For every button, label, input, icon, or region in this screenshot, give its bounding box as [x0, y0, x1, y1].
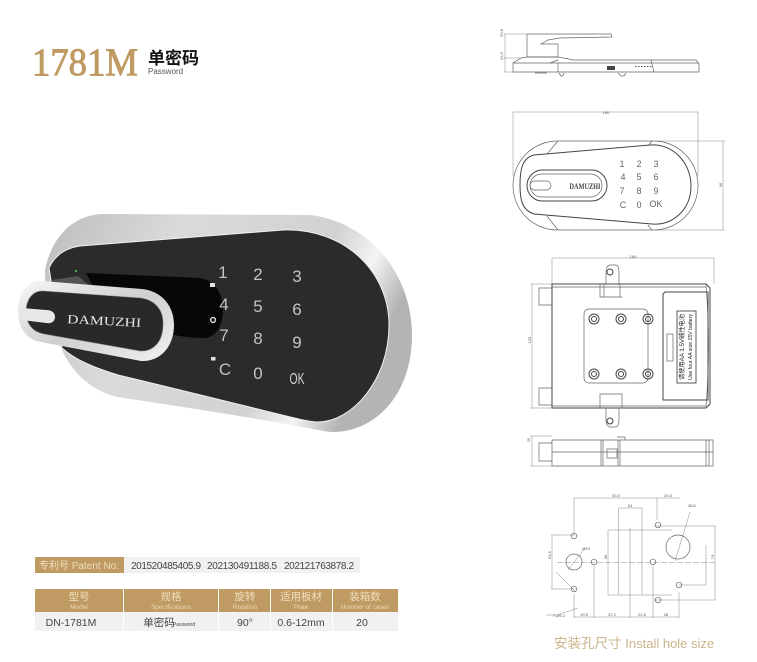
drawing: install hole dimensions: 54.5: [547, 550, 552, 559]
battery label: 请使用AA 1.5V碱性电池: [678, 314, 686, 380]
drawing: install hole dimensions: 20.5: [664, 493, 673, 498]
front keypad digits: 3: [653, 159, 659, 169]
drawing: front view: [513, 110, 725, 230]
drawing: install hole dimensions: Ø24: [688, 503, 697, 508]
drawing: side view: [499, 28, 699, 76]
front keypad digits: 1: [619, 159, 625, 169]
keypad status icons: [210, 283, 216, 360]
specification table: Specifications: [151, 604, 192, 611]
back case: [552, 284, 710, 408]
battery label: [677, 311, 696, 383]
front keypad digits: C: [620, 200, 627, 210]
front keypad digits: OK: [649, 199, 663, 209]
keypad digits: 7: [219, 326, 229, 345]
table row: Password: [173, 622, 195, 628]
mounting plate: [584, 309, 648, 383]
patent bar: [35, 557, 360, 573]
mounting screws: [589, 314, 653, 379]
keypad digits: C: [219, 360, 231, 379]
battery label: Use four AA size 15V battery: [688, 314, 694, 380]
drawing: front view: 96: [718, 182, 723, 187]
keypad digits: 4: [219, 295, 229, 314]
drawing: side view: 24.5: [499, 51, 504, 60]
side tabs: [539, 288, 552, 405]
front keypad digits: 4: [620, 172, 626, 182]
patent bar: 201520485405.9: [131, 561, 201, 572]
subtitle: password type: 单密码: [148, 48, 199, 68]
specification table: Rotation: [233, 604, 257, 611]
patent bar: 专利号 Patent No:: [39, 559, 119, 572]
table row: 20: [356, 617, 368, 629]
drawing: back view: 160: [630, 254, 637, 259]
drawing: bottom view: 25: [526, 437, 531, 442]
silver body: [45, 214, 412, 432]
keypad digits: 1: [218, 263, 228, 282]
drawing: install hole dimensions: 19.5: [580, 612, 589, 617]
title: model number: 1781M: [32, 41, 138, 84]
drawing: install hole dimensions: [546, 493, 716, 618]
keypad digits: 9: [292, 333, 302, 352]
specification table: Plate: [294, 604, 309, 611]
top bracket: [600, 265, 622, 297]
specification table: 装箱数: [349, 590, 381, 603]
drawing: install hole dimensions: 7-Ø5.2: [553, 613, 566, 618]
keypad digits: 8: [253, 329, 263, 348]
subtitle: password type: [148, 48, 199, 76]
specification table: 规格: [160, 590, 182, 603]
front keypad face: [520, 145, 691, 224]
front handle: [527, 170, 607, 201]
drawing: install hole dimensions: 53.5: [612, 493, 621, 498]
front keypad digits: [619, 159, 663, 210]
drawing: install hole dimensions: Ø19: [582, 546, 591, 551]
drawing: install hole dimensions: 24: [628, 503, 633, 508]
drawing: install hole dimensions: 22.5: [638, 612, 647, 617]
front keypad digits: 6: [653, 172, 659, 182]
keypad digits: [218, 263, 305, 388]
drawing: back view: [527, 254, 714, 427]
drawing: install hole dimensions: 37.2: [608, 612, 617, 617]
specification table: 旋转: [234, 590, 256, 603]
table row: [46, 612, 368, 631]
drawing: install hole dimensions: 30: [603, 554, 608, 559]
lock product illustration: [18, 214, 412, 432]
handle insert: [22, 308, 55, 323]
front keypad digits: 0: [636, 200, 642, 210]
table row: 0.6-12mm: [277, 617, 325, 629]
handle: [18, 281, 174, 361]
specification table: Number of cases: [340, 604, 390, 611]
table row: 单密码: [143, 616, 175, 629]
table row: DN-1781M: [46, 617, 96, 629]
handle brand: DAMUZHI: [67, 312, 142, 330]
front keypad digits: 7: [619, 186, 625, 196]
front handle: DAMUZHI: [570, 181, 601, 191]
caption: install hole size: 安装孔尺寸 Install hole size: [554, 636, 714, 651]
drawing: install hole dimensions: 74: [710, 554, 715, 559]
black keypad face: [49, 230, 389, 422]
keypad digits: OK: [290, 371, 305, 388]
keypad digits: 0: [253, 364, 263, 383]
front keypad digits: 8: [636, 186, 642, 196]
keypad digits: 2: [253, 265, 263, 284]
keypad digits: 6: [292, 300, 302, 319]
drawing: front view: 160: [603, 110, 610, 115]
handle window: [86, 273, 223, 338]
table row: 90°: [237, 617, 253, 629]
handle neck: [52, 276, 90, 290]
front keypad digits: 2: [636, 159, 642, 169]
drawing: back view: 125: [527, 336, 532, 343]
table header: [35, 589, 398, 612]
front outline: [513, 141, 698, 230]
patent bar: 202130491188.5: [207, 561, 277, 572]
subtitle: password type: Password: [148, 67, 183, 76]
front keypad digits: 5: [636, 172, 642, 182]
specification table: [35, 589, 398, 631]
specification table: 型号: [68, 590, 90, 603]
keypad digits: 5: [253, 297, 263, 316]
drawing: side view: 20.8: [499, 28, 504, 37]
bottom bracket: [600, 394, 622, 427]
front keypad digits: 9: [653, 186, 659, 196]
keypad digits: 3: [292, 267, 302, 286]
indicator led: [75, 270, 77, 272]
drawing: bottom view: [526, 436, 713, 466]
patent bar: 202121763878.2: [284, 561, 354, 572]
specification table: 适用板材: [280, 590, 322, 603]
battery cover: [663, 292, 708, 400]
drawing: install hole dimensions: 26: [664, 612, 669, 617]
specification table: Model: [70, 604, 88, 611]
